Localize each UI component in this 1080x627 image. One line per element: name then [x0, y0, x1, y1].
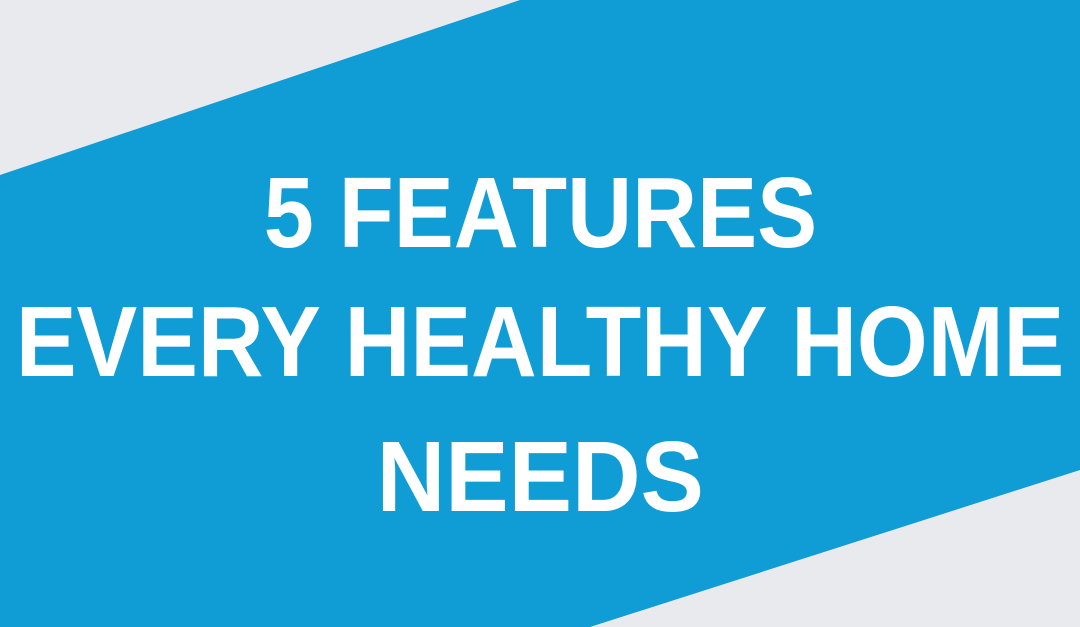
title: EVERY HEALTHY HOME [16, 286, 1064, 398]
title: NEEDS [376, 421, 704, 533]
title: 5 FEATURES [263, 157, 817, 269]
